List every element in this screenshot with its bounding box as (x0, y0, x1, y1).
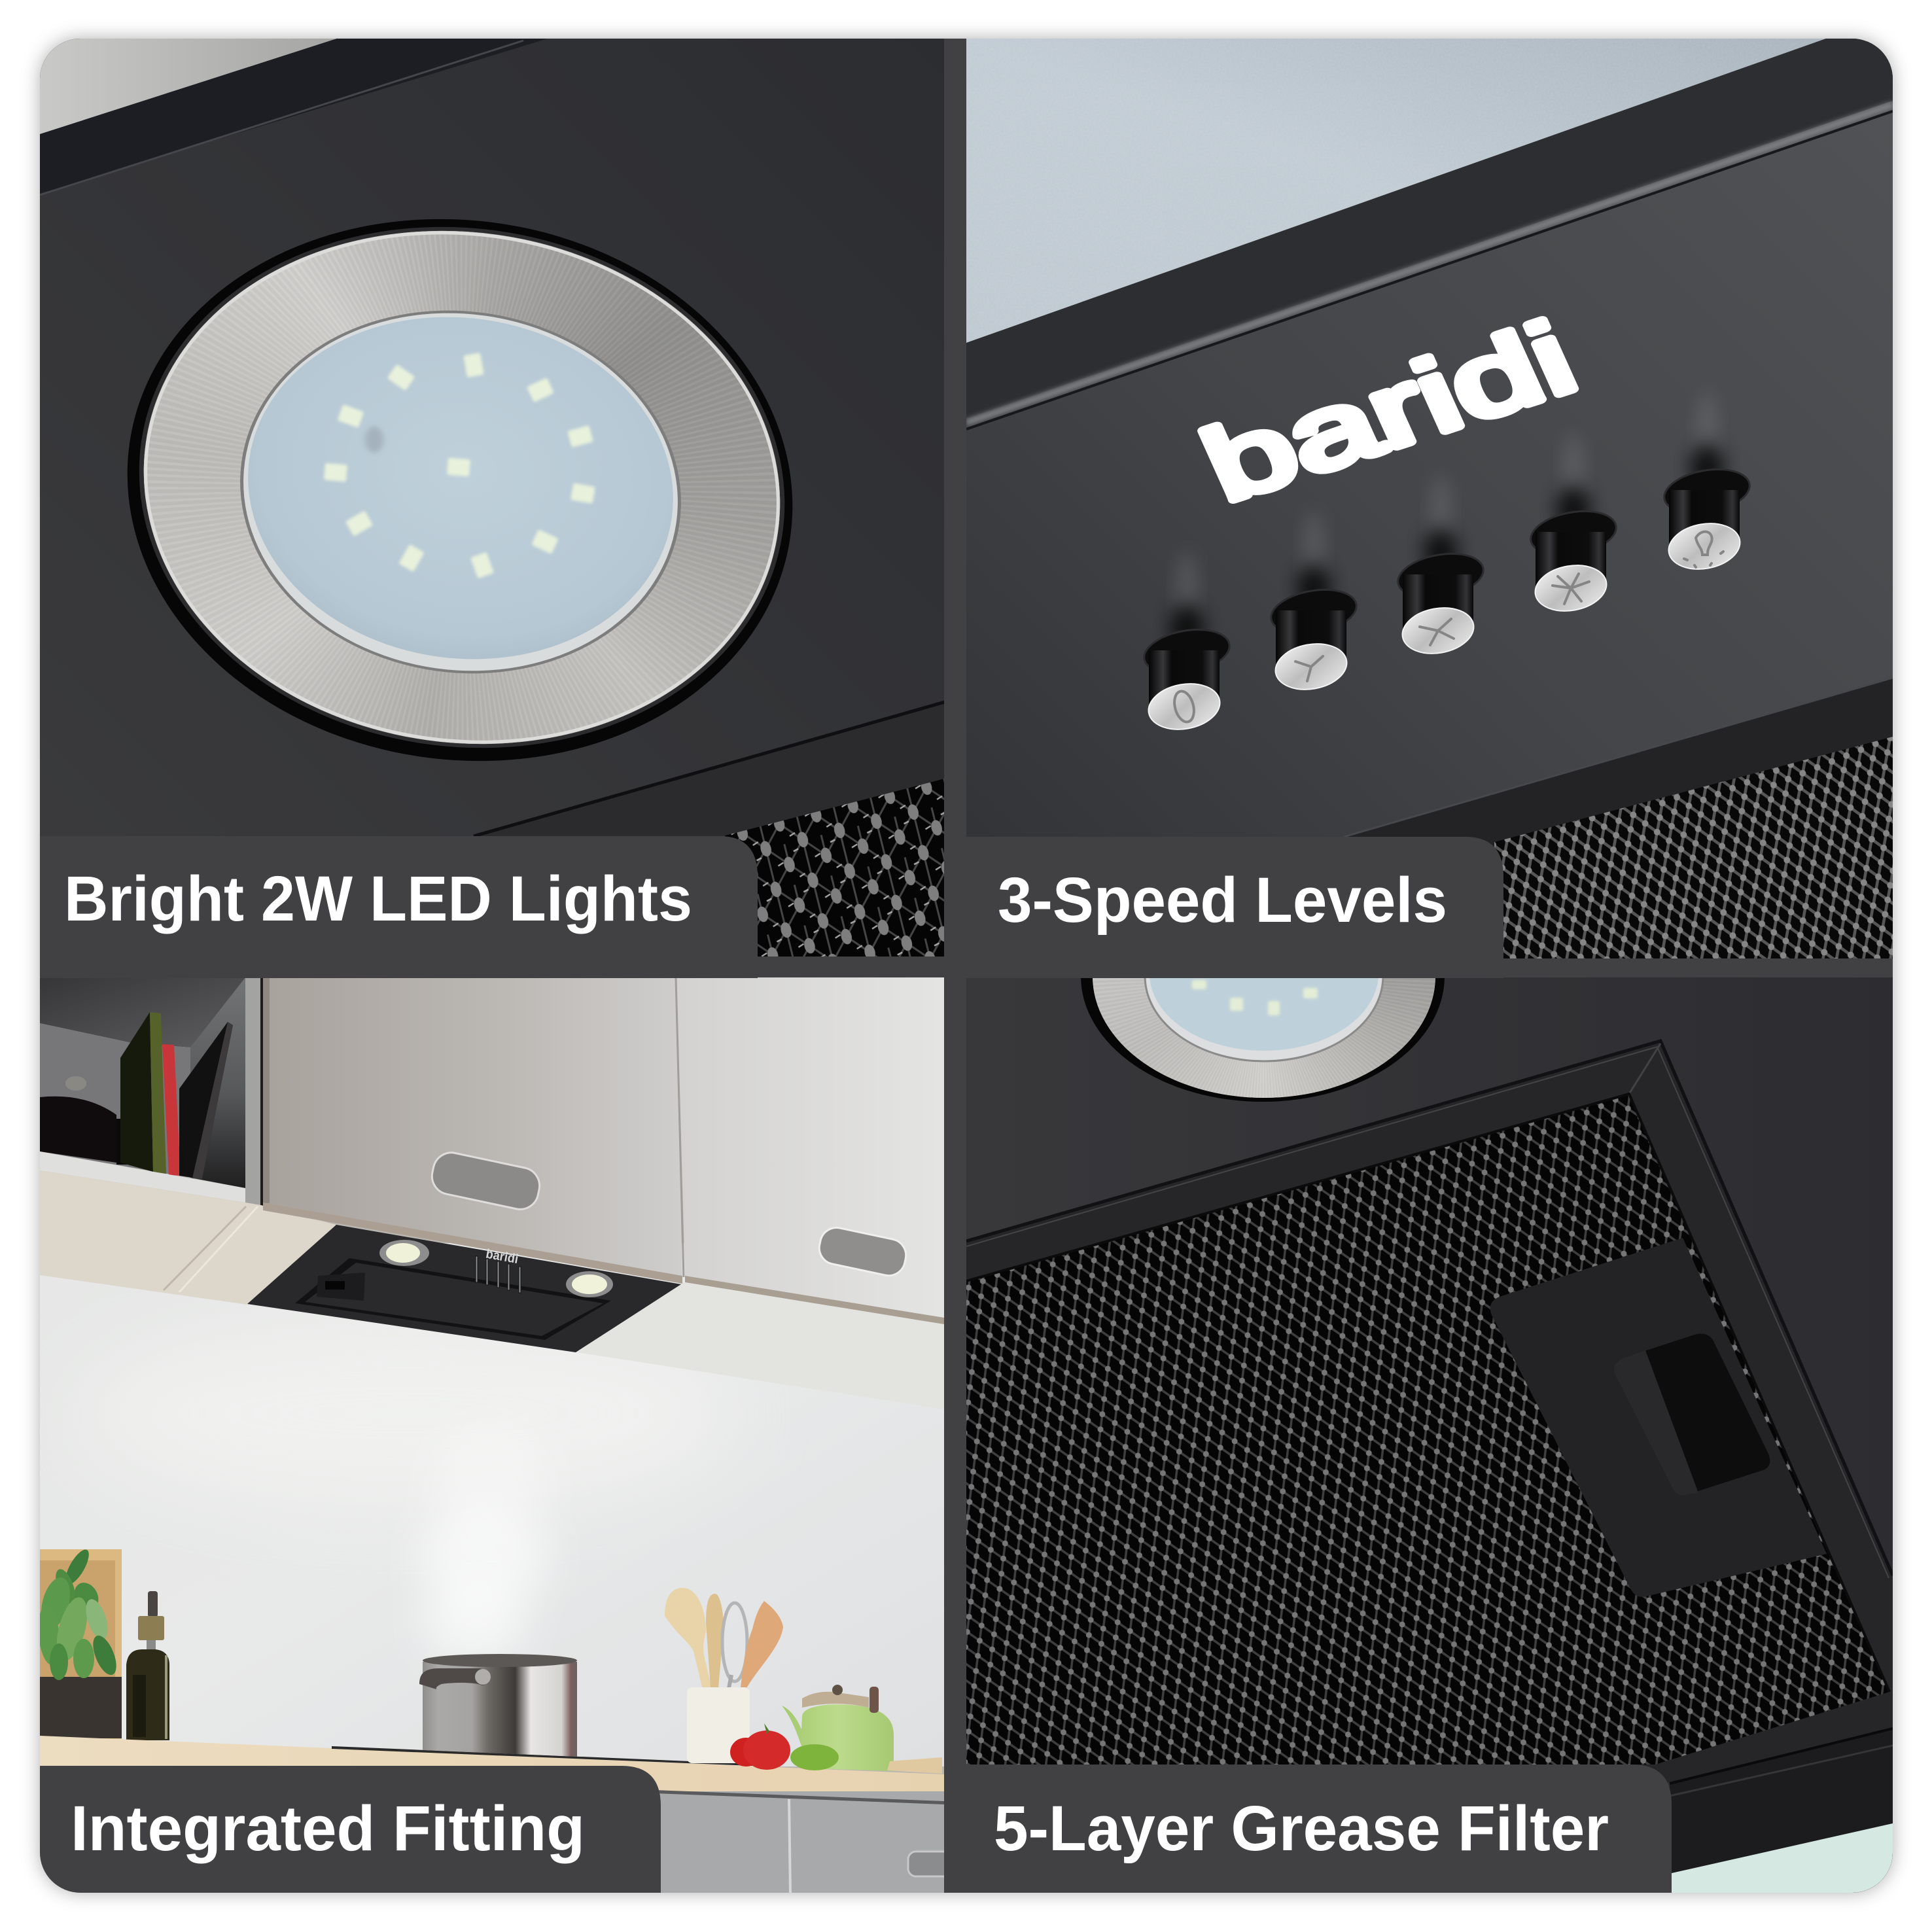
left cabinet door (263, 977, 682, 1276)
LED chips (324, 353, 595, 578)
hood front lip (966, 39, 1893, 419)
button symbols (1171, 532, 1723, 724)
lamp crop (1081, 851, 1445, 1102)
mint countertop corner (1672, 1823, 1893, 1893)
handle recess (1614, 1333, 1770, 1496)
soffit left (40, 1170, 336, 1305)
cutting board (40, 1549, 122, 1739)
steam (419, 1426, 550, 1662)
hood light left (379, 1240, 429, 1266)
filter handle plate (1490, 1238, 1827, 1597)
shelf plank (40, 1151, 245, 1203)
caption: integrated fitting (40, 1766, 661, 1893)
caption: 3-speed levels: 3-Speed Levels (998, 864, 1447, 936)
hood front lip (40, 39, 548, 194)
lower frame edge (1670, 1729, 1893, 1893)
caption: bright LED lights: Bright 2W LED Lights (64, 863, 692, 934)
lower hood band (480, 728, 922, 836)
mesh filter (966, 1094, 1889, 1765)
panel: 3-speed levels photo (966, 39, 1893, 958)
open shelf (40, 977, 263, 1206)
wall (40, 1243, 944, 1766)
mesh filter (1494, 737, 1893, 958)
tomatoes (730, 1723, 790, 1770)
hood filter (295, 1258, 611, 1340)
panel: grease filter photo (966, 851, 1893, 1893)
books (120, 1012, 233, 1179)
countertop (40, 1736, 944, 1802)
small buttons (476, 1256, 521, 1293)
built-in hood (247, 1225, 681, 1352)
panel: integrated fitting kitchen photo (35, 977, 954, 1895)
right cabinet door (676, 977, 944, 1318)
caption: integrated fitting: Integrated Fitting (71, 1793, 585, 1864)
small logo: baridi (485, 1247, 519, 1267)
lower hood band (1344, 678, 1893, 958)
caption: bright LED lights (40, 836, 758, 978)
caption: 5-layer grease filter: 5-Layer Grease Filter (994, 1793, 1609, 1864)
ceiling (966, 39, 1826, 343)
LED lamp (127, 219, 793, 762)
plant (35, 1547, 122, 1738)
caption: 5-layer grease filter (944, 1765, 1672, 1893)
control buttons (1140, 391, 1753, 735)
green kettle (782, 1685, 894, 1771)
caption: 3-speed levels (962, 837, 1503, 978)
cooktop (332, 1746, 752, 1766)
oil bottle (126, 1591, 169, 1740)
ceiling sliver (40, 39, 337, 134)
brand logo: baridi (1186, 300, 1592, 523)
base cabinets (654, 1790, 954, 1895)
filter frame (966, 1041, 1893, 1782)
mesh filter corner (723, 779, 945, 957)
utensils (665, 1588, 783, 1763)
soffit right (577, 1282, 944, 1409)
panel: bright LED lights photo (40, 39, 945, 957)
steel pot (419, 1654, 577, 1757)
utensil jar (687, 1687, 750, 1763)
pepper (790, 1744, 839, 1770)
cutting board on counter (887, 1757, 942, 1774)
pot on shelf (40, 1076, 130, 1165)
hood light right (566, 1271, 613, 1297)
